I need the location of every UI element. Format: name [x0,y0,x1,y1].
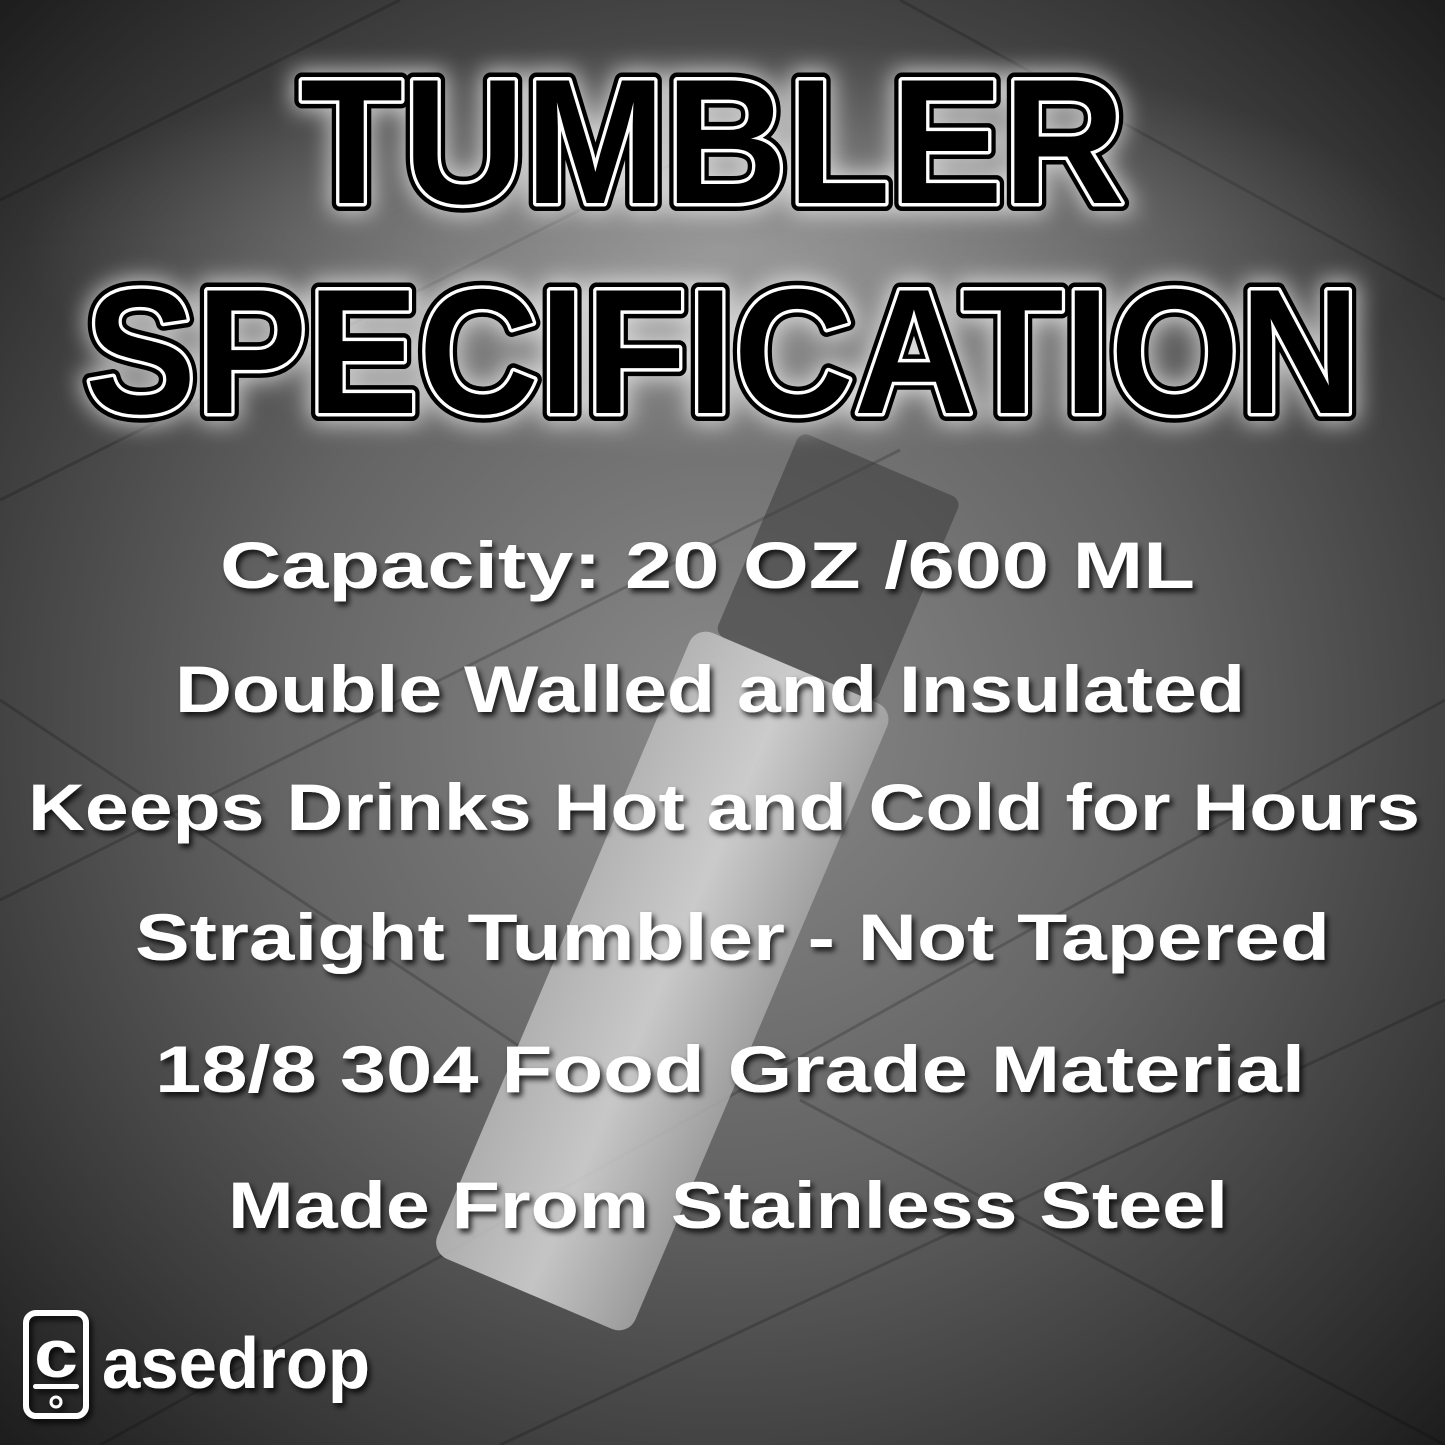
title: TUMBLER [300,42,1125,241]
title: TUMBLER [300,42,1125,241]
icon: phone [26,1313,86,1416]
title: SPECIFICATION [85,252,1360,451]
spec: straight: Straight Tumbler - Not Tapered [135,900,1330,974]
title [22,40,1422,460]
title: SPECIFICATION [85,252,1360,451]
spec: material: 18/8 304 Food Grade Material [155,1032,1305,1106]
title: SPECIFICATION [85,252,1360,451]
title: SPECIFICATION [85,252,1360,451]
title: TUMBLER [300,42,1125,241]
logo: casedrop: asedrop [102,1324,370,1404]
tumbler image [430,423,980,1336]
spec list [28,528,1420,1242]
spec: keeps drinks: Keeps Drinks Hot and Cold for Hours [28,770,1420,844]
spec: double walled: Double Walled and Insulated [175,652,1245,726]
icon: phone: c [34,1316,78,1392]
title: TUMBLER [300,42,1125,241]
spec: capacity: Capacity: 20 OZ /600 ML [220,528,1195,602]
logo: casedrop [26,1313,370,1416]
spec: stainless: Made From Stainless Steel [228,1168,1228,1242]
